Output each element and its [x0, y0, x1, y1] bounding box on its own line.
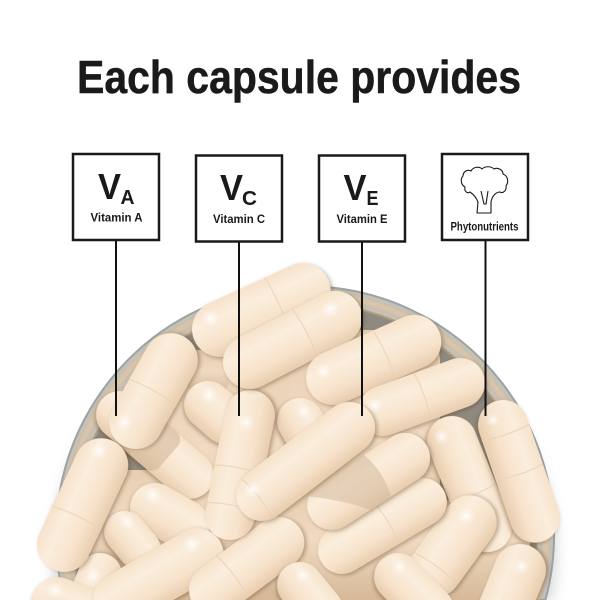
- panel: Vitamin A: A: [120, 187, 134, 209]
- capsule: [297, 306, 450, 414]
- panel: Vitamin E: [319, 156, 405, 242]
- capsule: [83, 518, 234, 600]
- title: Each capsule provides: [77, 51, 521, 103]
- panel: Vitamin A: Vitamin A: [90, 212, 142, 224]
- capsule: [95, 502, 169, 579]
- capsule: [174, 371, 259, 454]
- capsule: [364, 543, 464, 600]
- capsule: [351, 351, 492, 443]
- panel: Vitamin C: [196, 156, 282, 242]
- capsule: [61, 546, 129, 600]
- capsule pile: [25, 254, 567, 600]
- panel: Vitamin A: [73, 154, 159, 240]
- panel: Vitamin C: C: [242, 188, 257, 210]
- panel: Vitamin E: E: [366, 188, 378, 210]
- capsule: [28, 429, 137, 581]
- capsule: [99, 323, 208, 459]
- connector line: Phytonutrients: [484, 240, 486, 416]
- capsule: [471, 393, 567, 549]
- capsule: [201, 386, 279, 544]
- capsule: [297, 423, 440, 540]
- panel: Phytonutrients: Phytonutrients: [450, 222, 518, 234]
- connector line: Vitamin A: [115, 240, 117, 416]
- capsule: [214, 281, 372, 398]
- capsule: [466, 536, 554, 600]
- dish shadow: [56, 307, 554, 600]
- capsule: [121, 474, 219, 559]
- connector line: Vitamin E: [361, 242, 363, 416]
- capsule: [269, 390, 341, 470]
- panel: Phytonutrients: [442, 154, 528, 240]
- panel: Vitamin C: Vitamin C: [213, 214, 265, 226]
- capsule: [86, 381, 224, 509]
- panel: Vitamin E: Vitamin E: [336, 214, 388, 226]
- capsule: [309, 469, 456, 583]
- connector line: Vitamin C: [238, 242, 240, 416]
- panel: Vitamin E: V: [344, 167, 366, 208]
- capsule: [419, 408, 520, 560]
- icon: broccoli: [461, 167, 508, 213]
- capsule: [179, 506, 315, 600]
- panel: Vitamin A: V: [98, 166, 121, 207]
- capsule: [268, 553, 352, 600]
- panel: Vitamin C: V: [220, 167, 243, 208]
- back filler capsules: [90, 330, 530, 600]
- capsule: [397, 485, 507, 600]
- capsule: [25, 570, 117, 600]
- dish: [56, 286, 554, 600]
- capsule: [183, 254, 340, 366]
- capsule: [226, 391, 386, 531]
